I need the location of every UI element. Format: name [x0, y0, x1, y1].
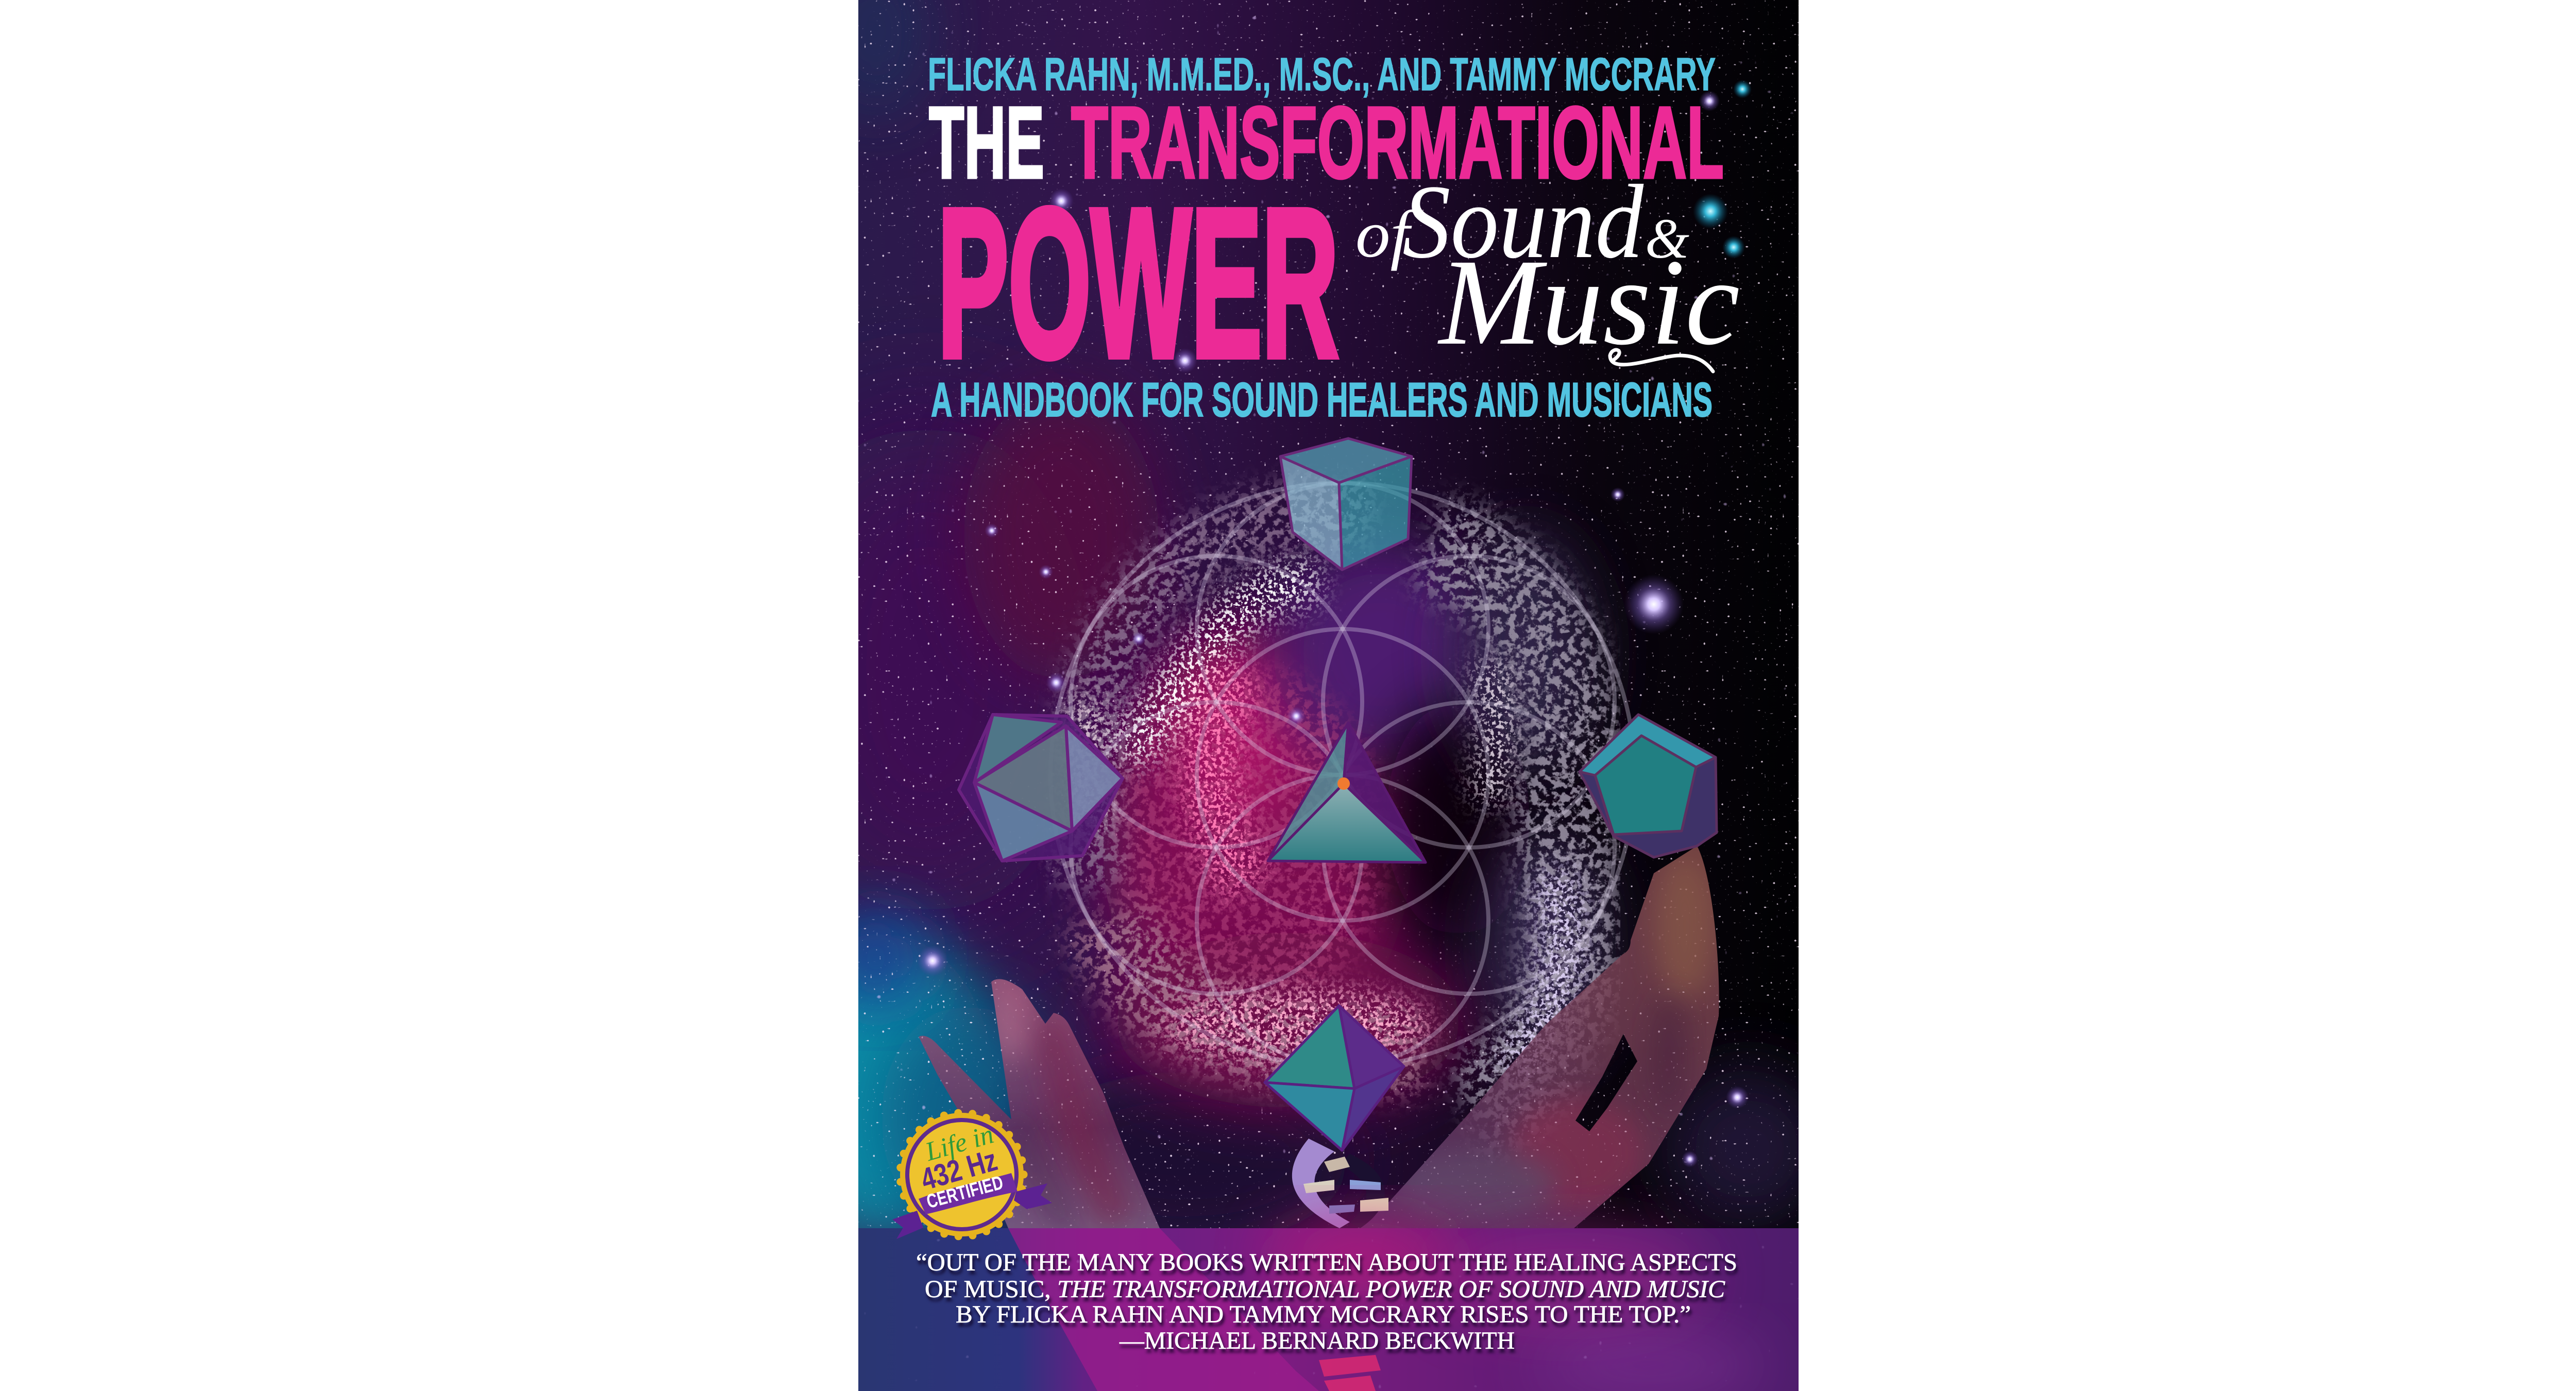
432 Hz certified badge: Life in — [922, 1119, 997, 1167]
endorsement quote: —MICHAEL BERNARD BECKWITH — [1119, 1327, 1515, 1354]
right hand — [1350, 840, 1726, 1231]
left hand — [912, 974, 1170, 1231]
432 Hz certified badge: 432 Hz — [917, 1142, 1001, 1197]
galaxy nebula — [1083, 513, 1602, 1108]
script title: of Sound and Music — [1355, 163, 1740, 371]
script title: of Sound and Music: & — [1645, 207, 1689, 270]
endorsement quote: BY FLICKA RAHN AND TAMMY MCCRARY RISES TO THE TOP.” — [956, 1301, 1691, 1328]
star field — [858, 0, 1799, 1228]
title: The: THE — [929, 86, 1044, 199]
dodecahedron polyhedron right — [1580, 715, 1717, 857]
tetrahedron polyhedron centre — [1268, 723, 1426, 862]
icosahedron polyhedron left — [959, 715, 1123, 861]
cube polyhedron — [1280, 438, 1412, 570]
script title: of Sound and Music: Music — [1437, 233, 1740, 370]
script title: of Sound and Music: of — [1355, 197, 1418, 272]
background: cosmic gradient and colour clouds — [858, 0, 1799, 1228]
DNA helix — [1292, 1139, 1388, 1228]
script title: of Sound and Music: Sound — [1402, 163, 1643, 280]
title: Transformational: TRANSFORMATIONAL — [1071, 86, 1724, 199]
endorsement quote: OF MUSIC, THE TRANSFORMATIONAL POWER OF SOUND AND MUSIC — [925, 1276, 1725, 1303]
book cover — [858, 0, 1799, 1391]
subtitle: A HANDBOOK FOR SOUND HEALERS AND MUSICIANS — [931, 372, 1713, 427]
endorsement quote — [916, 1249, 1737, 1354]
octahedron polyhedron bottom — [1265, 1006, 1404, 1150]
endorsement quote: “OUT OF THE MANY BOOKS WRITTEN ABOUT THE HEALING ASPECTS — [916, 1249, 1737, 1276]
flower of life circles — [1050, 483, 1635, 1067]
authors line: FLICKA RAHN, M.M.ED., M.SC., AND TAMMY MCCRARY — [928, 49, 1716, 100]
quote band — [858, 1221, 1799, 1391]
title: Power: POWER — [938, 165, 1338, 401]
432 Hz certified badge — [892, 1113, 1052, 1239]
sparkle stars over hands — [917, 80, 1752, 1228]
432 Hz certified badge: CERTIFIED — [924, 1172, 1006, 1213]
